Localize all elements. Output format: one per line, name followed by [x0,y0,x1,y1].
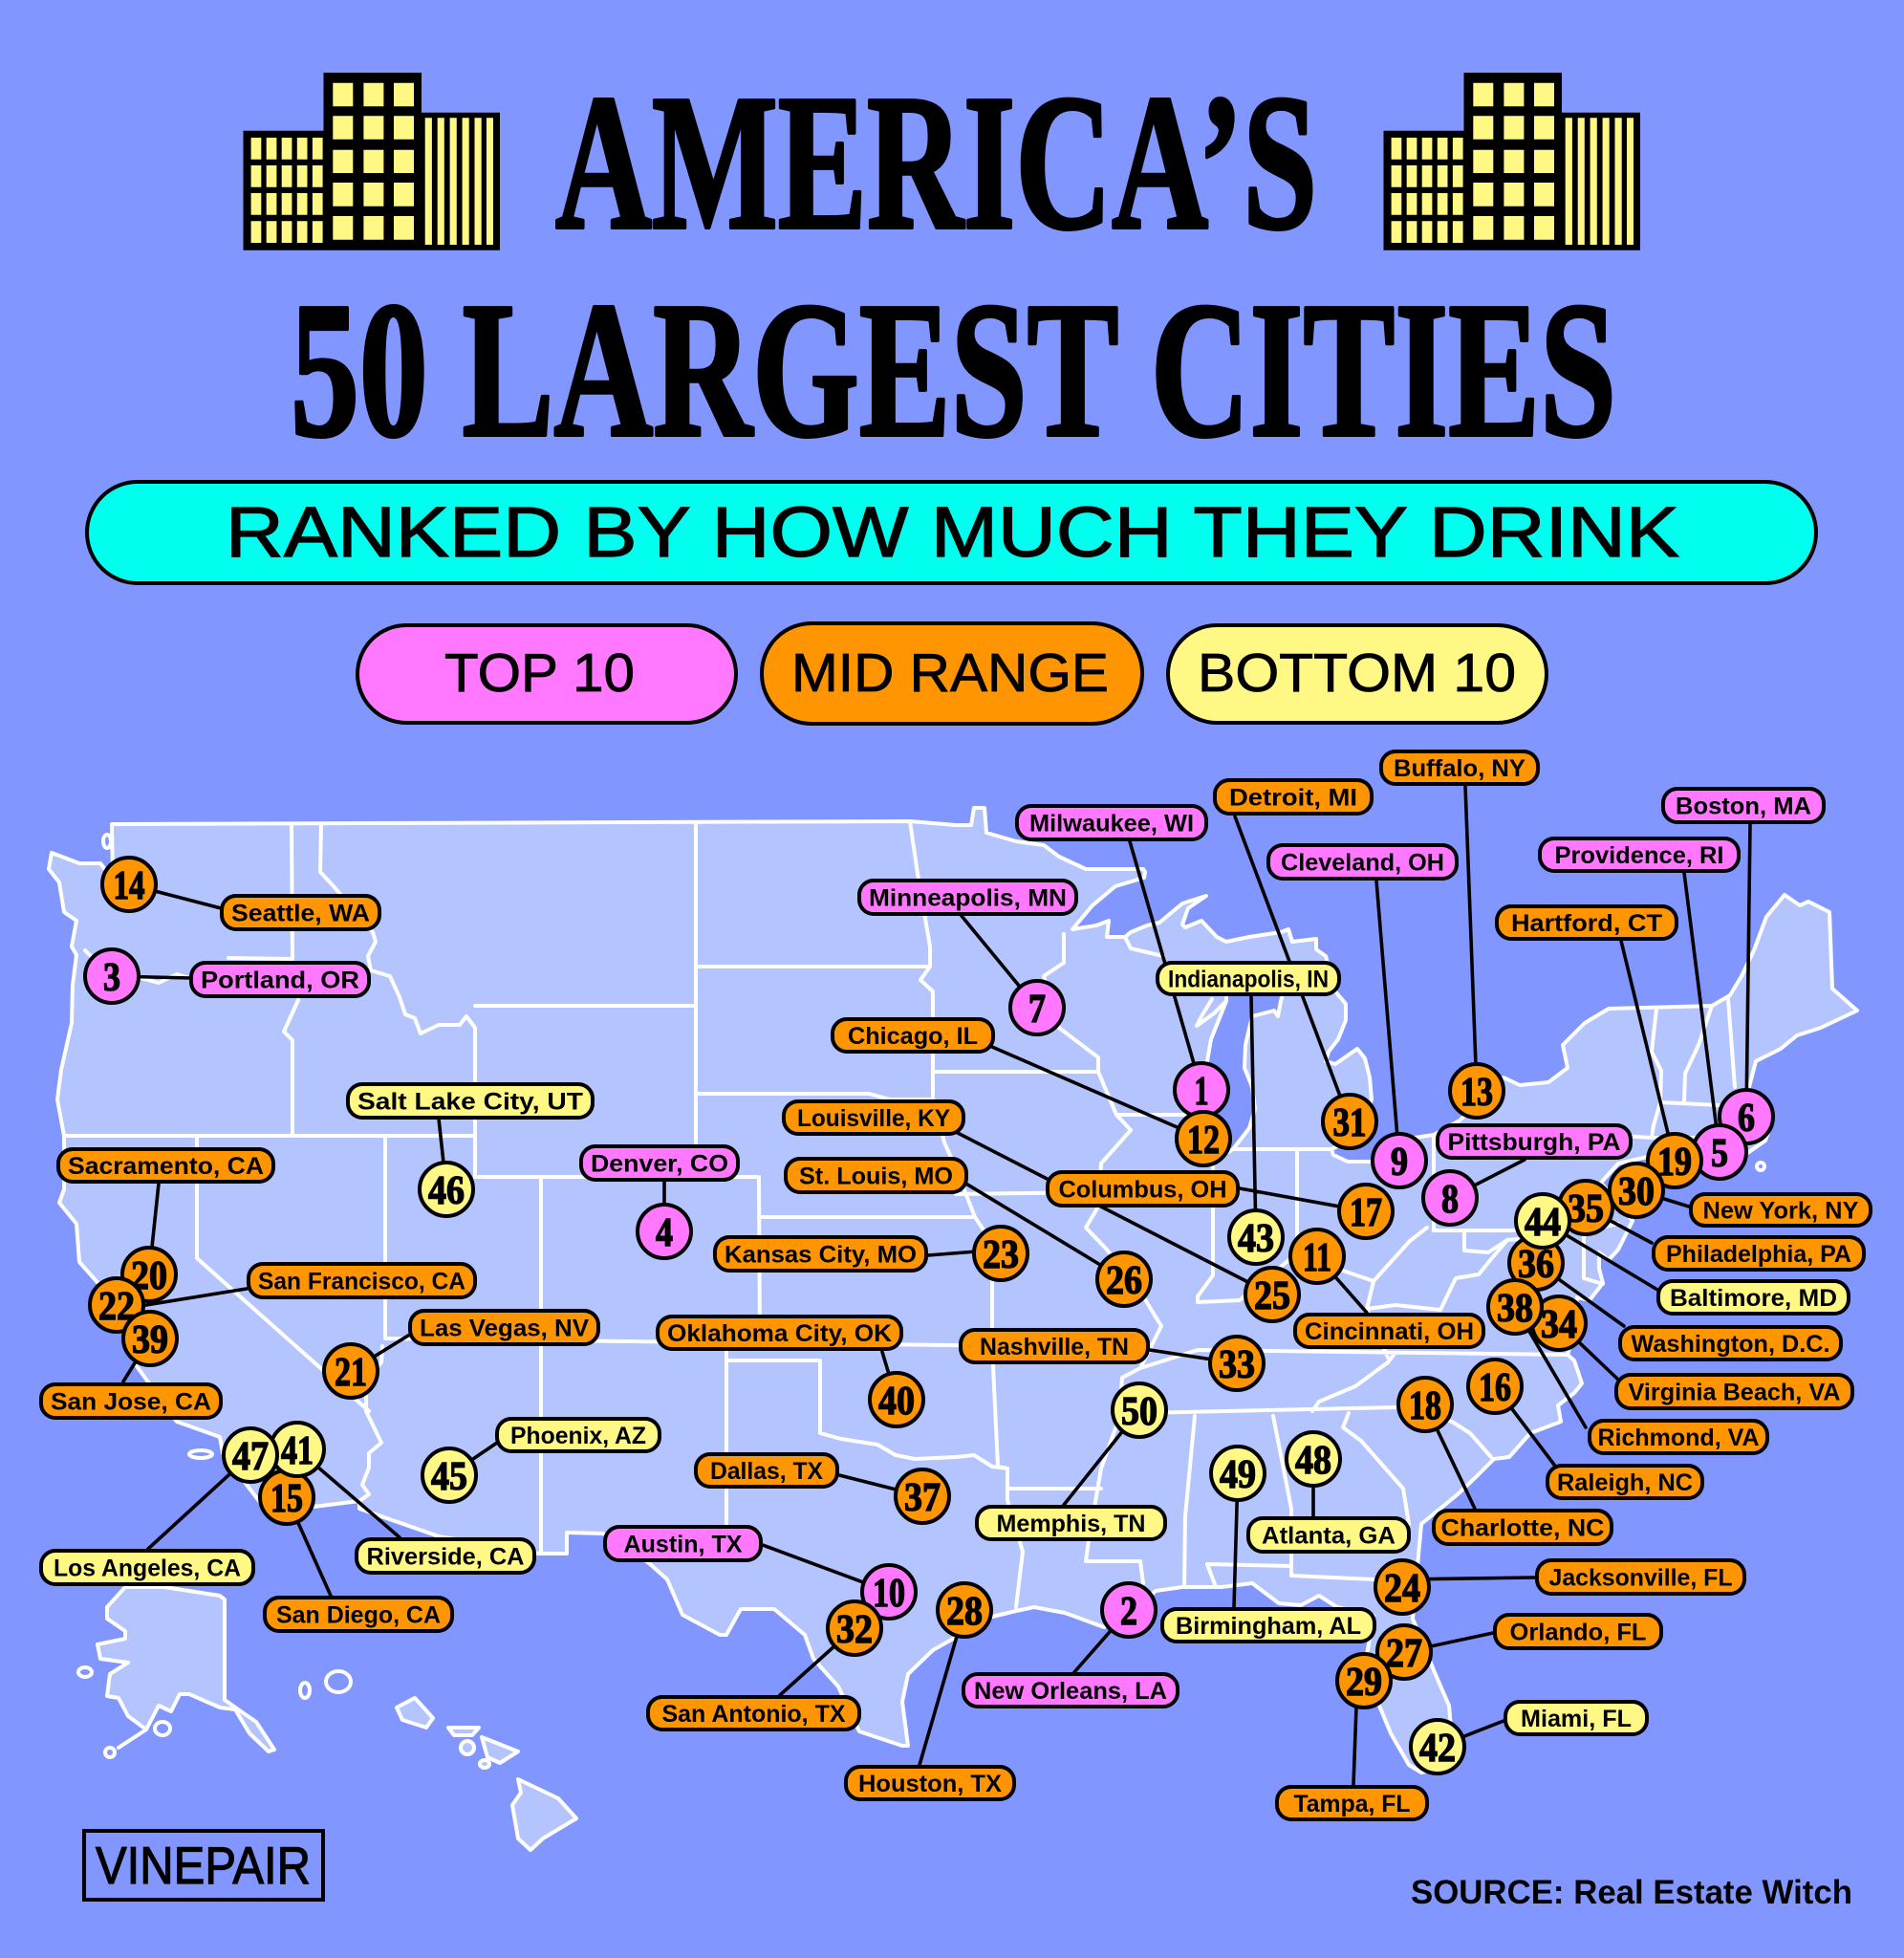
rank 16: 16 [1479,1366,1511,1410]
rank 9: 9 [1391,1141,1408,1185]
rank 40 [870,1373,923,1426]
icon: buildings right [1384,73,1640,250]
rank 14: 14 [113,864,145,908]
label: Austin [605,1527,761,1560]
rank 16 [1468,1360,1522,1413]
rank 50: 50 [1121,1390,1158,1434]
label: Jacksonville: Jacksonville, FL [1548,1564,1732,1591]
rank 40: 40 [878,1380,915,1424]
label: Minneapolis [859,881,1076,914]
rank 24 [1375,1560,1429,1614]
rank 23: 23 [983,1233,1019,1277]
label: San Diego: San Diego, CA [276,1602,441,1629]
label: Denver [581,1146,738,1180]
rank 25 [1245,1268,1299,1321]
rank 12: 12 [1187,1119,1220,1163]
rank 5 [1693,1125,1746,1179]
rank 43 [1229,1210,1283,1264]
label: Providence: Providence, RI [1554,842,1724,869]
label: Portland [191,963,369,996]
label: Cincinnati: Cincinnati, OH [1305,1318,1474,1345]
label: Columbus [1048,1172,1238,1206]
rank 18: 18 [1409,1384,1441,1428]
label: Salt Lake City [348,1084,593,1118]
rank 30: 30 [1618,1170,1655,1214]
rank 47: 47 [232,1435,269,1479]
label: Philadelphia: Philadelphia, PA [1666,1241,1851,1268]
icon: buildings left [243,73,500,250]
rank 15 [260,1470,314,1524]
rank 46: 46 [428,1169,465,1213]
label: Sacramento: Sacramento, CA [68,1153,264,1180]
label: New York: New York, NY [1703,1197,1859,1224]
rank 23 [974,1227,1028,1280]
rank 7: 7 [1028,988,1046,1032]
label: Indianapolis: Indianapolis, IN [1168,966,1329,992]
rank 39 [123,1312,177,1365]
label: San Jose: San Jose, CA [51,1388,211,1415]
rank 37 [896,1469,949,1523]
label: Tampa: Tampa, FL [1294,1791,1411,1817]
rank 15: 15 [270,1477,303,1521]
rank 1 [1175,1063,1228,1117]
rank 29 [1337,1654,1391,1708]
label: Phoenix [497,1419,660,1451]
label: Riverside: Riverside, CA [367,1543,524,1570]
rank 46 [420,1163,473,1216]
rank 26 [1097,1252,1151,1306]
rank 24: 24 [1384,1567,1420,1611]
rank 25: 25 [1254,1274,1290,1318]
label: Detroit [1215,780,1372,814]
rank 47 [224,1428,277,1482]
rank 6: 6 [1738,1097,1755,1141]
rank 17: 17 [1350,1191,1382,1235]
label: Baltimore [1658,1281,1849,1314]
label: Seattle [222,896,379,929]
rank 43: 43 [1238,1217,1274,1261]
label: Las Vegas: Las Vegas, NV [420,1316,589,1342]
rank 34 [1532,1296,1586,1350]
rank 32 [828,1601,881,1655]
legend: mid range [762,623,1142,724]
rank 17 [1339,1185,1393,1238]
rank 34: 34 [1541,1303,1577,1347]
rank 6 [1720,1090,1773,1143]
label: San Jose [41,1384,221,1418]
label: St. Louis: St. Louis, MO [799,1163,953,1189]
rank 28 [938,1583,991,1637]
rank 4: 4 [656,1211,673,1255]
label: Nashville: Nashville, TN [980,1334,1129,1360]
rank 33: 33 [1219,1343,1255,1387]
label: Raleigh: Raleigh, NC [1557,1469,1693,1496]
rank 21: 21 [335,1351,367,1395]
rank 48 [1287,1432,1340,1486]
legend: top 10 [357,625,736,723]
label: Detroit: Detroit, MI [1229,784,1357,811]
rank 14 [102,858,156,911]
rank 22 [90,1278,143,1332]
rank 7 [1010,981,1064,1034]
rank 44 [1516,1194,1569,1248]
label: Houston: Houston, TX [858,1771,1002,1797]
rank 35 [1559,1181,1612,1234]
label: Baltimore: Baltimore, MD [1670,1285,1837,1312]
label: Chicago [833,1019,993,1052]
label: Seattle: Seattle, WA [231,901,370,927]
map: contiguous United States [49,808,1857,1773]
subtitle banner [87,482,1816,583]
rank 38 [1488,1280,1542,1334]
rank 31: 31 [1332,1101,1367,1145]
label: Las Vegas [410,1311,598,1344]
rank 3: 3 [103,956,120,1000]
label: Memphis [977,1507,1165,1539]
label: Dallas [696,1454,837,1487]
rank 20 [122,1248,176,1301]
label: San Antonio: San Antonio, TX [661,1701,846,1728]
label: Houston [846,1767,1014,1799]
legend: top 10: TOP 10 [444,642,635,704]
rank 20: 20 [131,1254,167,1298]
label: Salt Lake City: Salt Lake City, UT [357,1088,583,1115]
rank 4 [638,1205,691,1258]
rank 26: 26 [1106,1259,1142,1303]
rank 41: 41 [281,1429,314,1473]
rank 32: 32 [836,1608,873,1652]
label: Dallas: Dallas, TX [710,1458,823,1485]
rank 33 [1210,1337,1264,1390]
label: Kansas City: Kansas City, MO [725,1241,917,1268]
label: Boston [1663,789,1824,822]
rank 27 [1377,1625,1431,1679]
label: Austin: Austin, TX [623,1532,743,1558]
legend: mid range: MID RANGE [791,642,1109,704]
rank 18 [1398,1378,1452,1431]
rank 11: 11 [1303,1236,1331,1280]
rank 5: 5 [1711,1132,1728,1176]
rank 12 [1177,1112,1230,1165]
label: Pittsburgh: Pittsburgh, PA [1447,1129,1621,1156]
subtitle banner: RANKED BY HOW MUCH THEY DRINK [226,492,1679,572]
rank 29: 29 [1346,1661,1382,1705]
title line 1: AMERICA’S [555,54,1317,270]
label: Richmond: Richmond, VA [1598,1425,1759,1451]
rank 13: 13 [1460,1071,1493,1115]
label: Miami [1505,1702,1647,1734]
leader lines connecting ranks to city labels [112,786,1750,1785]
rank 19: 19 [1657,1141,1692,1185]
label: Cleveland: Cleveland, OH [1281,849,1444,876]
rank 35: 35 [1568,1187,1604,1231]
label: Boston: Boston, MA [1676,794,1811,820]
label: Nashville [961,1330,1148,1362]
rank 49: 49 [1220,1453,1256,1497]
rank 39: 39 [132,1318,168,1362]
rank 19 [1648,1134,1701,1187]
label: Miami: Miami, FL [1521,1706,1632,1732]
label: Milwaukee [1017,806,1206,839]
label: Oklahoma City: Oklahoma City, OK [667,1320,892,1347]
label: Buffalo [1381,751,1538,784]
rank 11 [1290,1229,1344,1283]
rank 10 [862,1565,916,1619]
rank 49 [1211,1447,1265,1500]
logo: VinePair: VINEPAIR [96,1836,311,1895]
rank 2 [1102,1583,1156,1637]
label: Denver: Denver, CO [591,1151,728,1178]
map: Alaska and Hawaii [78,835,576,1850]
rank 21 [324,1344,378,1398]
label: Charlotte: Charlotte, NC [1441,1514,1604,1541]
rank 36 [1509,1236,1563,1290]
rank 42: 42 [1419,1727,1456,1771]
rank 22: 22 [98,1285,135,1329]
legend: bottom 10: BOTTOM 10 [1198,642,1516,704]
label: Milwaukee: Milwaukee, WI [1029,811,1194,838]
label: Atlanta: Atlanta, GA [1262,1522,1396,1549]
rank 1: 1 [1195,1070,1208,1114]
label: Chicago: Chicago, IL [848,1023,978,1050]
rank 44: 44 [1525,1201,1561,1245]
rank 31 [1323,1095,1376,1148]
label: New Orleans: New Orleans, LA [974,1678,1167,1705]
label: Louisville: Louisville, KY [797,1105,950,1132]
label: Orlando: Orlando, FL [1510,1620,1646,1646]
rank 8: 8 [1441,1178,1459,1222]
rank 36: 36 [1518,1243,1554,1287]
label: Tampa [1277,1787,1427,1819]
label: Atlanta [1248,1518,1409,1552]
rank 3 [85,949,139,1003]
rank 10: 10 [873,1572,905,1616]
label: Columbus: Columbus, OH [1059,1176,1227,1203]
rank 45: 45 [431,1455,467,1499]
label: Portland: Portland, OR [201,968,359,994]
rank 28: 28 [946,1590,983,1634]
rank 30 [1610,1164,1663,1217]
label: Birmingham: Birmingham, AL [1176,1613,1361,1640]
label: Riverside [357,1539,534,1573]
label: Hartford [1497,906,1677,939]
label: San Francisco: San Francisco, CA [258,1268,465,1294]
rank 8 [1423,1171,1477,1225]
legend: bottom 10 [1168,625,1547,723]
label: Cleveland [1268,845,1457,879]
source note: SOURCE: Real Estate Witch [1411,1874,1852,1911]
rank 50 [1113,1383,1166,1437]
rank 9 [1373,1134,1426,1187]
label: Buffalo: Buffalo, NY [1394,755,1525,782]
rank 37: 37 [904,1476,941,1520]
label: Providence [1540,838,1739,871]
label: Memphis: Memphis, TN [996,1511,1145,1537]
label: Hartford: Hartford, CT [1511,910,1662,937]
label: St. Louis [786,1159,966,1192]
rank 45 [422,1448,476,1502]
rank 42 [1411,1720,1464,1773]
label: Orlando [1495,1615,1661,1648]
label: Los Angeles: Los Angeles, CA [54,1555,241,1581]
rank 41 [270,1423,324,1476]
label: Washington: Washington, D.C. [1631,1331,1829,1358]
label: Virginia Beach: Virginia Beach, VA [1629,1379,1841,1405]
label: Phoenix: Phoenix, AZ [510,1423,646,1449]
label: Charlotte [1434,1511,1612,1544]
rank 2: 2 [1120,1590,1137,1634]
rank 27: 27 [1386,1632,1422,1676]
rank 13 [1450,1064,1504,1118]
label: Minneapolis: Minneapolis, MN [869,885,1067,912]
rank 48: 48 [1295,1439,1331,1483]
rank 38: 38 [1497,1287,1533,1331]
